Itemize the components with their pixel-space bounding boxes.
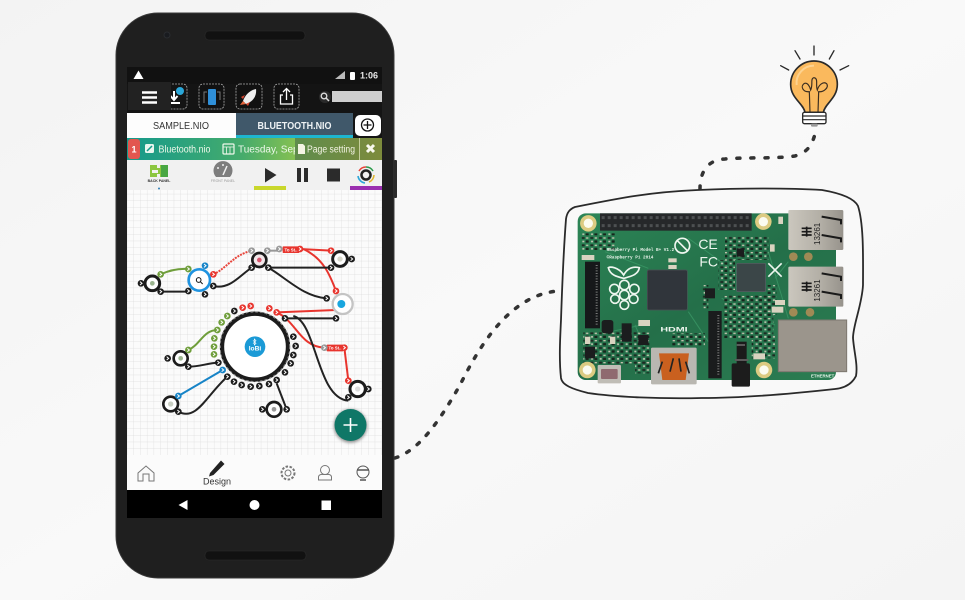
gpio header	[600, 213, 752, 231]
usb port upper: 13261	[813, 222, 822, 245]
tabs	[127, 113, 382, 138]
usb port lower: 13261	[813, 279, 822, 302]
rocket icon	[236, 84, 262, 109]
design canvas	[127, 190, 382, 455]
usb port lower	[788, 267, 843, 317]
green info bar	[127, 138, 382, 160]
lower left node	[163, 397, 178, 411]
design tab: Design	[203, 476, 231, 486]
front camera	[164, 32, 170, 38]
purple marker	[350, 186, 382, 190]
android navigation bar	[127, 490, 382, 518]
certification marks	[675, 236, 782, 277]
action toolbar	[127, 160, 382, 190]
play button	[265, 168, 276, 182]
right top node	[333, 252, 347, 266]
to-string block top	[283, 246, 299, 253]
certification marks: FC	[699, 253, 718, 269]
main node with logo: loBi	[249, 346, 261, 353]
phone rotate icon	[199, 84, 224, 109]
to-string block top: To St..	[285, 247, 297, 252]
search box	[319, 91, 382, 103]
page number	[128, 139, 140, 159]
connection ports	[138, 246, 372, 415]
capacitors and resistors	[582, 217, 785, 359]
node diagram	[138, 246, 372, 417]
pause button	[297, 168, 308, 182]
side buttons	[394, 160, 397, 198]
board silkscreen text	[607, 248, 675, 260]
home key	[250, 500, 260, 510]
tab: sample: SAMPLE.NIO	[153, 120, 209, 132]
gear icon	[282, 466, 294, 480]
raspberry logo	[608, 267, 639, 309]
ethernet label: ETHERNET	[811, 374, 835, 379]
front panel icon: FRONT PANEL	[211, 179, 235, 183]
back panel icon: BACK PANEL	[148, 179, 171, 183]
back panel icon	[148, 165, 171, 190]
board silkscreen text: ©Raspberry Pi 2014	[607, 255, 654, 260]
dashed connector: board to bulb	[700, 134, 815, 189]
phone body	[116, 13, 394, 578]
date: Tuesday, September	[238, 144, 330, 156]
raspberry pi board	[578, 210, 847, 387]
camera connector	[708, 311, 722, 378]
grey display node	[333, 294, 353, 314]
add button	[334, 409, 367, 442]
hdmi port	[651, 348, 697, 384]
sketched outline around board	[560, 188, 863, 398]
audio jack	[732, 342, 750, 387]
share icon	[274, 84, 299, 109]
bottom navigation	[127, 455, 382, 490]
left middle node	[174, 351, 188, 365]
right lower node	[350, 381, 365, 397]
toolbar	[127, 82, 382, 113]
yellow marker	[254, 186, 286, 190]
lan chip	[737, 263, 766, 292]
front panel icon	[211, 161, 235, 183]
design tab	[203, 460, 231, 486]
small components	[585, 248, 744, 358]
tab: bluetooth: BLUETOOTH.NIO	[258, 120, 332, 132]
board silkscreen text: Raspberry Pi Model B+ V1.2	[607, 248, 675, 253]
add tab button	[355, 115, 381, 136]
processor chip	[647, 270, 687, 310]
menu button	[128, 82, 171, 110]
ethernet port	[778, 320, 847, 372]
back key	[178, 500, 188, 510]
to-string block bottom: To St..	[329, 346, 341, 351]
lower middle node	[267, 402, 281, 417]
to-string block bottom	[327, 345, 343, 351]
date	[222, 143, 295, 155]
page number: 1	[131, 144, 137, 154]
home icon	[138, 466, 154, 481]
display connector	[585, 262, 600, 328]
surface-mount component clusters	[582, 233, 777, 373]
traces	[595, 238, 788, 355]
dashed connector: phone to board	[395, 291, 558, 458]
status bar: 1:06	[360, 70, 378, 80]
close icon	[367, 145, 374, 152]
left sensor node	[145, 276, 160, 291]
stop button	[327, 168, 340, 182]
main node with logo	[220, 312, 290, 381]
tab: sample	[127, 113, 236, 138]
settings gear	[358, 167, 374, 183]
blue search node	[189, 269, 210, 291]
hdmi label: HDMI	[660, 327, 688, 334]
user icon	[318, 466, 332, 480]
page setting: Page setting	[307, 144, 355, 156]
infographic canvas	[116, 12, 864, 578]
status bar	[127, 67, 382, 84]
download icon	[165, 84, 187, 109]
robot icon	[357, 466, 369, 480]
icon: light bulb	[781, 46, 849, 127]
bottom speaker	[205, 551, 306, 560]
top speaker	[205, 31, 305, 40]
tab: bluetooth	[236, 113, 353, 138]
micro usb port	[598, 365, 621, 383]
file name	[145, 144, 211, 156]
circuit board	[578, 213, 836, 380]
file name: Bluetooth.nio	[158, 144, 211, 156]
phone	[116, 13, 397, 578]
wires	[161, 249, 348, 414]
middle top node	[252, 253, 266, 267]
mounting holes	[579, 213, 772, 378]
certification marks: CE	[698, 236, 718, 252]
usb port upper	[788, 210, 843, 261]
recents key	[322, 500, 331, 510]
